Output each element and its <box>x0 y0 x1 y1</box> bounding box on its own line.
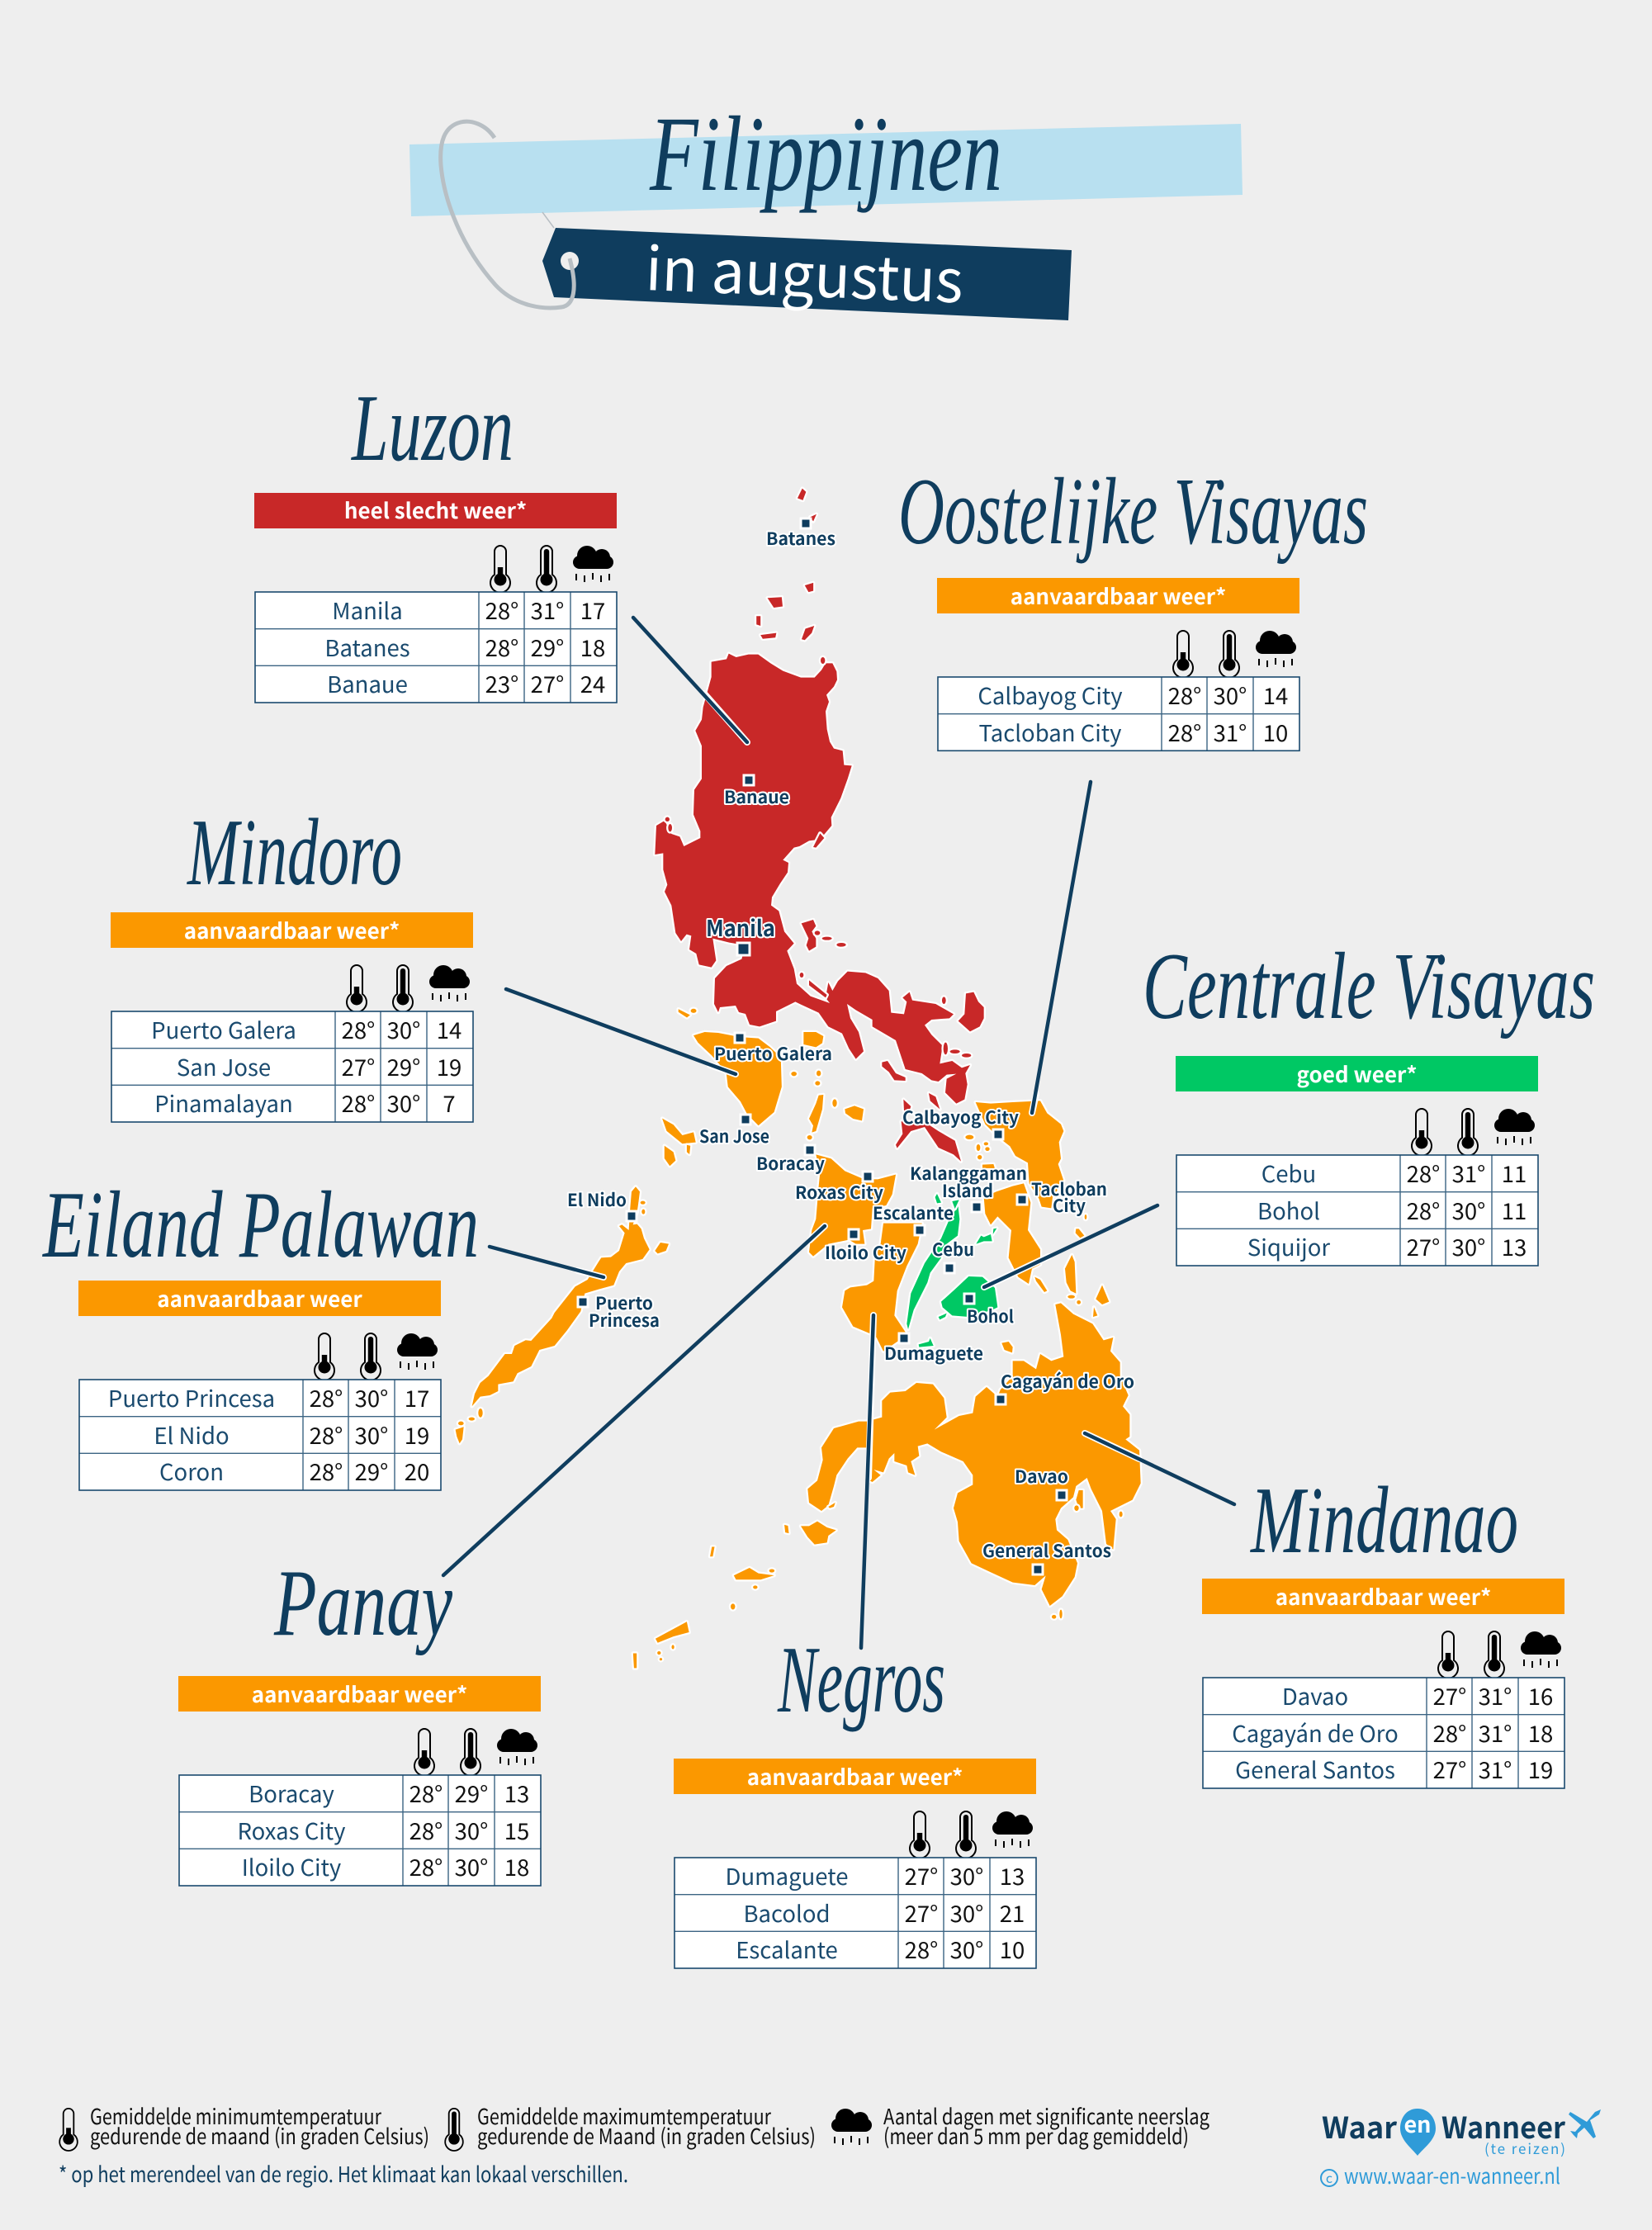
map labels: Calbayog City <box>902 1105 1019 1129</box>
map labels: Cagayán de Oro <box>1001 1369 1134 1394</box>
status bar and table: Oostelijke Visayas: 28° <box>1168 678 1201 711</box>
status bar and table: Centrale Visayas: goed weer* <box>1296 1058 1418 1089</box>
status bar and table: Luzon: 17 <box>580 593 605 626</box>
status bar and table: Panay: 15 <box>504 1813 529 1846</box>
heading: Oostelijke Visayas: Oostelijke Visayas <box>898 459 1368 564</box>
panel: Centrale Visayas <box>1143 934 1595 1266</box>
status bar and table: Centrale Visayas: 28° <box>1407 1193 1440 1226</box>
status bar and table: Mindoro: 28° <box>342 1086 375 1119</box>
status bar and table: Eiland Palawan <box>78 1281 441 1490</box>
light blue banner <box>409 124 1243 216</box>
status bar and table: Oostelijke Visayas: Tacloban City <box>978 715 1122 748</box>
icon: rain cloud <box>831 2109 872 2145</box>
status bar and table: Centrale Visayas: Cebu <box>1261 1156 1316 1189</box>
logo: Waar en Wanneer: www.waar-en-wanneer.nl <box>1344 2160 1560 2190</box>
map labels: El Nido <box>567 1187 627 1212</box>
status bar and table: Panay: 13 <box>504 1776 529 1809</box>
status bar and table: Negros: Bacolod <box>743 1896 831 1929</box>
logo: Waar en Wanneer: Wanneer <box>1441 2105 1565 2147</box>
title: Filippijnen: Filippijnen <box>649 95 1002 214</box>
status bar and table: Panay: 28° <box>409 1813 443 1846</box>
status bar and table: Mindoro: 19 <box>437 1049 462 1082</box>
status bar and table: Eiland Palawan: 30° <box>355 1418 388 1451</box>
status bar and table: Luzon: 27° <box>531 666 564 699</box>
status bar and table: Eiland Palawan: Puerto Princesa <box>108 1380 275 1413</box>
legend text: minimum temperature <box>90 2100 429 2151</box>
status bar and table: Panay: 28° <box>409 1849 443 1882</box>
status bar and table: Centrale Visayas: 13 <box>1502 1229 1527 1262</box>
status bar and table: Mindanao: Cagayán de Oro <box>1232 1716 1399 1749</box>
status bar and table: Mindanao: 31° <box>1479 1678 1512 1712</box>
line: Centrale Visayas <box>984 1205 1157 1287</box>
Siquijor <box>919 1338 934 1347</box>
legend text: maximum temperature <box>477 2100 816 2151</box>
status bar and table: Mindoro: aanvaardbaar weer* <box>184 915 400 945</box>
map labels: Roxas City <box>795 1180 883 1205</box>
map labels: City <box>1053 1193 1086 1218</box>
status bar and table: Mindoro: 27° <box>342 1049 375 1082</box>
Visayas islands <box>809 1093 1109 1352</box>
status bar and table: Negros: aanvaardbaar weer* <box>747 1761 963 1792</box>
line: Panay <box>443 1226 825 1575</box>
status bar and table: Oostelijke Visayas: 30° <box>1214 678 1247 711</box>
status bar and table: Centrale Visayas: 30° <box>1452 1229 1485 1262</box>
Leyte <box>984 1183 1040 1284</box>
status bar and table: Luzon: 29° <box>531 630 564 663</box>
status bar and table: Negros: 30° <box>950 1896 983 1929</box>
map of the Philippines <box>456 489 1141 1668</box>
logo: Waar en Wanneer: en <box>1403 2107 1432 2139</box>
status bar and table: Oostelijke Visayas: 14 <box>1263 678 1288 711</box>
map labels: General Santos <box>982 1538 1111 1563</box>
logo: Waar en Wanneer: c <box>1326 2167 1332 2187</box>
panel: Oostelijke Visayas <box>898 459 1368 750</box>
map labels: Banaue <box>724 784 789 809</box>
status bar and table: Negros: 10 <box>1000 1932 1025 1965</box>
status bar and table: Eiland Palawan: 17 <box>405 1380 429 1413</box>
status bar and table: Luzon: Batanes <box>324 630 410 663</box>
legend text: minimum temperature: Gemiddelde minimumtemperatuur <box>90 2100 382 2131</box>
status bar and table: Panay: 28° <box>409 1776 443 1809</box>
legend text: rain days: (meer dan 5 mm per dag gemiddeld) <box>883 2120 1189 2151</box>
logo: Waar en Wanneer: (te reizen) <box>1484 2138 1565 2158</box>
logo pin <box>1400 2109 1436 2156</box>
website <box>1321 2170 1337 2186</box>
heading: Mindoro: Mindoro <box>187 800 402 905</box>
status bar and table: Centrale Visayas: Siquijor <box>1247 1229 1330 1262</box>
panel: Luzon <box>254 376 617 703</box>
Negros <box>842 1224 922 1352</box>
status bar and table: Mindanao: 27° <box>1433 1752 1466 1785</box>
status bar and table: Eiland Palawan: 19 <box>405 1418 429 1451</box>
status bar and table: Oostelijke Visayas: Calbayog City <box>977 678 1123 711</box>
tag hole <box>561 252 579 270</box>
status bar and table: Mindanao: 16 <box>1528 1678 1553 1712</box>
status bar and table: Luzon: 23° <box>485 666 518 699</box>
map labels: Kalanggaman <box>910 1161 1027 1186</box>
status bar and table: Oostelijke Visayas: 31° <box>1214 715 1247 748</box>
status bar and table: Panay <box>178 1676 541 1886</box>
map labels: Dumaguete <box>884 1341 983 1366</box>
status bar and table: Centrale Visayas: 30° <box>1452 1193 1485 1226</box>
heading: Luzon: Luzon <box>351 376 514 481</box>
panel: Mindoro <box>111 800 473 1122</box>
status bar and table: Centrale Visayas: 28° <box>1407 1156 1440 1189</box>
status bar and table: Eiland Palawan: aanvaardbaar weer <box>157 1283 362 1314</box>
status bar and table: Centrale Visayas <box>1176 1056 1538 1266</box>
map labels: Puerto Galera <box>714 1041 832 1066</box>
icon: maximum temperature <box>445 2109 463 2151</box>
footnote: * op het merendeel van de regio. Het klimaat kan lokaal verschillen. <box>59 2158 628 2189</box>
line: Negros <box>861 1315 873 1648</box>
line: Oostelijke Visayas <box>1032 782 1091 1113</box>
map labels: Manila <box>706 911 775 943</box>
line: Luzon <box>633 618 747 742</box>
status bar and table: Mindoro: 28° <box>342 1012 375 1045</box>
status bar and table: Mindoro: 14 <box>437 1012 462 1045</box>
panel: Negros <box>674 1627 1036 1968</box>
map labels: Batanes <box>766 526 835 551</box>
status bar and table: Oostelijke Visayas: aanvaardbaar weer* <box>1011 580 1226 611</box>
panel: Panay <box>178 1551 541 1886</box>
Panay <box>809 1154 896 1257</box>
Sulu archipelago <box>784 1525 788 1533</box>
status bar and table: Negros <box>674 1759 1036 1968</box>
line: Mindoro <box>506 989 736 1074</box>
status bar and table: Mindoro: 30° <box>387 1086 420 1119</box>
legend text: minimum temperature: gedurende de maand (in graden Celsius) <box>90 2120 429 2151</box>
legend text: rain days: Aantal dagen met significante neerslag <box>883 2100 1209 2131</box>
Mindoro and Sulu islands (orange) <box>633 1032 788 1668</box>
map labels: Davao <box>1015 1464 1068 1489</box>
status bar and table: Oostelijke Visayas <box>937 578 1299 750</box>
status bar and table: Panay: aanvaardbaar weer* <box>252 1678 467 1709</box>
map labels: Bohol <box>967 1304 1014 1328</box>
status bar and table: Mindanao: General Santos <box>1235 1752 1395 1785</box>
status bar and table: Centrale Visayas: 11 <box>1502 1156 1527 1189</box>
status bar and table: Panay: Iloilo City <box>242 1849 341 1882</box>
map labels: Iloilo City <box>825 1240 906 1265</box>
status bar and table: Mindoro: 29° <box>387 1049 420 1082</box>
line: Palawan <box>490 1247 604 1277</box>
status bar and table: Luzon: 18 <box>580 630 605 663</box>
status bar and table: Luzon: 28° <box>485 593 518 626</box>
status bar and table: Mindanao: 31° <box>1479 1752 1512 1785</box>
legend text: rain days <box>883 2100 1209 2151</box>
status bar and table: Mindoro: San Jose <box>177 1049 271 1082</box>
Mindoro <box>693 1032 782 1125</box>
status bar and table: Negros: 30° <box>950 1858 983 1891</box>
status bar and table: Centrale Visayas: 11 <box>1502 1193 1527 1226</box>
panel: Eiland Palawan <box>42 1172 479 1490</box>
status bar and table: Luzon: 24 <box>580 666 605 699</box>
Batanes and Babuyan islets (red) <box>756 489 817 640</box>
status bar and table: Eiland Palawan: 28° <box>310 1380 343 1413</box>
status bar and table: Negros: 27° <box>905 1858 938 1891</box>
status bar and table: Mindanao: 28° <box>1433 1716 1466 1749</box>
map labels <box>567 526 1134 1563</box>
map labels: Island <box>942 1178 993 1203</box>
heading: Negros: Negros <box>777 1627 945 1732</box>
leader lines <box>443 618 1234 1648</box>
status bar and table: Negros: Dumaguete <box>726 1858 848 1891</box>
status bar and table: Mindoro: 7 <box>443 1086 456 1119</box>
status bar and table: Luzon: Banaue <box>327 666 408 699</box>
status bar and table: Oostelijke Visayas: 28° <box>1168 715 1201 748</box>
status bar and table: Mindoro <box>111 912 473 1122</box>
status bar and table: Luzon: 28° <box>485 630 518 663</box>
legend text: maximum temperature: gedurende de Maand (in graden Celsius) <box>477 2120 816 2151</box>
status bar and table: Eiland Palawan: 30° <box>355 1380 388 1413</box>
status bar and table: Panay: 29° <box>455 1776 488 1809</box>
subtitle: in augustus: in augustus <box>644 220 965 320</box>
status bar and table: Eiland Palawan: 29° <box>355 1454 388 1487</box>
status bar and table: Negros: 27° <box>905 1896 938 1929</box>
Bicol islets (red) and Romblon islets (orange) <box>791 920 984 1139</box>
status bar and table: Centrale Visayas: Bohol <box>1257 1193 1320 1226</box>
status bar and table: Panay: Roxas City <box>237 1813 346 1846</box>
navy tag <box>542 228 1072 320</box>
status bar and table: Oostelijke Visayas: 10 <box>1263 715 1288 748</box>
title banner <box>409 95 1243 320</box>
status bar and table: Mindanao: 31° <box>1479 1716 1512 1749</box>
map labels: San Jose <box>699 1124 769 1148</box>
logo: Waar en Wanneer <box>1321 2105 1601 2190</box>
status bar and table: Eiland Palawan: 20 <box>405 1454 429 1487</box>
tag string <box>441 121 574 308</box>
status bar and table: Luzon: 31° <box>531 593 564 626</box>
status bar and table: Eiland Palawan: El Nido <box>154 1418 230 1451</box>
icon: plane <box>1569 2109 1601 2138</box>
status bar and table: Mindanao: Davao <box>1282 1678 1348 1712</box>
legend <box>59 2100 1209 2189</box>
status bar and table: Luzon: Manila <box>332 593 403 626</box>
map labels: Boracay <box>756 1151 825 1176</box>
status bar and table: Eiland Palawan: 28° <box>310 1454 343 1487</box>
tag string back <box>542 212 554 228</box>
map labels: Escalante <box>873 1200 954 1225</box>
map labels: Tacloban <box>1031 1177 1107 1201</box>
status bar and table: Centrale Visayas: 31° <box>1452 1156 1485 1189</box>
status bar and table: Luzon: heel slecht weer* <box>344 495 527 525</box>
heading: Eiland Palawan: Eiland Palawan <box>42 1172 479 1277</box>
Samar <box>976 1101 1063 1208</box>
status bar and table: Panay: 30° <box>455 1813 488 1846</box>
status bar and table: Mindanao <box>1202 1579 1564 1788</box>
map labels: Cebu <box>932 1237 974 1262</box>
Palawan island (orange) <box>456 1186 669 1443</box>
status bar and table: Mindoro: Puerto Galera <box>151 1012 296 1045</box>
Luzon main island (red) <box>655 654 970 1104</box>
panel: Mindanao <box>1202 1468 1564 1788</box>
status bar and table: Luzon <box>254 493 617 703</box>
Bohol <box>941 1276 997 1317</box>
heading: Panay: Panay <box>273 1551 453 1655</box>
status bar and table: Mindoro: Pinamalayan <box>154 1086 293 1119</box>
status bar and table: Negros: 21 <box>1000 1896 1025 1929</box>
status bar and table: Negros: 30° <box>950 1932 983 1965</box>
map labels: Puerto <box>595 1290 653 1315</box>
map markers <box>578 518 1067 1574</box>
status bar and table: Negros: 28° <box>905 1932 938 1965</box>
status bar and table: Negros: Escalante <box>736 1932 838 1965</box>
status bar and table: Mindoro: 30° <box>387 1012 420 1045</box>
status bar and table: Eiland Palawan: Coron <box>159 1454 224 1487</box>
Cebu <box>906 1203 959 1329</box>
status bar and table: Negros: 13 <box>1000 1858 1025 1891</box>
icon: minimum temperature <box>59 2109 78 2151</box>
status bar and table: Eiland Palawan: 28° <box>310 1418 343 1451</box>
logo wordmark: Waar <box>1322 2105 1397 2147</box>
map labels: Princesa <box>589 1308 660 1333</box>
status bar and table: Panay: Boracay <box>249 1776 334 1809</box>
heading: Mindanao: Mindanao <box>1250 1468 1518 1573</box>
line: Mindanao <box>1085 1433 1234 1504</box>
status bar and table: Centrale Visayas: 27° <box>1407 1229 1440 1262</box>
status bar and table: Mindanao: 19 <box>1528 1752 1553 1785</box>
Mindanao <box>801 1303 1141 1619</box>
small northern Mindoro islets (orange) <box>679 1009 697 1017</box>
status bar and table: Panay: 30° <box>455 1849 488 1882</box>
status bar and table: Mindanao: 27° <box>1433 1678 1466 1712</box>
status bar and table: Mindanao: 18 <box>1528 1716 1553 1749</box>
legend text: maximum temperature: Gemiddelde maximumtemperatuur <box>477 2100 772 2131</box>
status bar and table: Panay: 18 <box>504 1849 529 1882</box>
status bar and table: Mindanao: aanvaardbaar weer* <box>1276 1581 1491 1612</box>
